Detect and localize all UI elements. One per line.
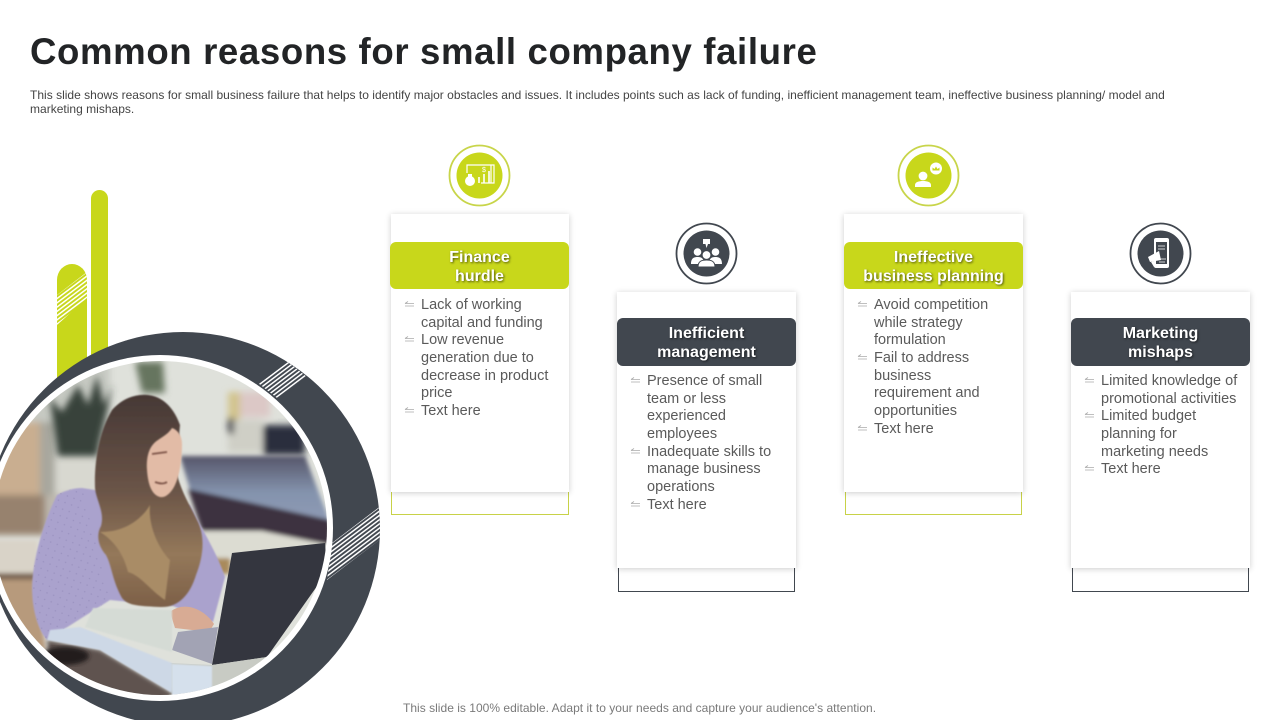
laptop xyxy=(172,543,327,665)
bullet list: Text here xyxy=(874,421,934,437)
decorative photo graphic xyxy=(0,190,380,720)
panel: finance hurdle xyxy=(388,144,572,515)
icon: person with idea bubble xyxy=(898,144,960,206)
bullet list: generation due to xyxy=(421,350,534,366)
heading: ineffective business planning: business planning xyxy=(863,268,1004,285)
face xyxy=(147,428,182,497)
bullet list: Limited budget xyxy=(1101,408,1196,424)
bottom outline box xyxy=(1072,562,1249,592)
bullet list: Limited knowledge of xyxy=(1101,373,1237,389)
bullet list: Lack of working xyxy=(421,297,522,313)
bullet list: while strategy xyxy=(874,315,963,331)
footer note: This slide is 100% editable. Adapt it to your needs and capture your audience's attention. xyxy=(403,701,876,715)
bullet list: Fail to address xyxy=(874,350,969,366)
heading: marketing mishaps: Marketing xyxy=(1123,325,1198,342)
bullet list: Text here xyxy=(647,497,707,513)
bullet list xyxy=(404,297,548,419)
bullet list: business xyxy=(874,368,931,384)
heading: inefficient management xyxy=(617,318,796,366)
icon: phone with megaphone xyxy=(1130,222,1192,284)
bullet list: promotional activities xyxy=(1101,391,1236,407)
heading: finance hurdle xyxy=(390,242,569,289)
bullet list xyxy=(1084,373,1238,477)
heading: ineffective business planning: Ineffective xyxy=(894,249,973,266)
panel: ineffective business planning xyxy=(841,144,1026,515)
bullet list: opportunities xyxy=(874,403,957,419)
bullet list: Avoid competition xyxy=(874,297,988,313)
bullet list: Inadequate skills to xyxy=(647,444,771,460)
card body xyxy=(1071,292,1250,568)
blond strands xyxy=(100,505,170,600)
bullet list: operations xyxy=(647,479,715,495)
lilac gap in hair xyxy=(130,530,146,563)
bullet list: Presence of small xyxy=(647,373,762,389)
bullet list: team or less xyxy=(647,391,726,407)
bullet list: employees xyxy=(647,426,717,442)
photo: woman working on laptop xyxy=(0,355,335,702)
heading: ineffective business planning xyxy=(844,242,1023,289)
bottom outline box xyxy=(391,484,569,515)
bullet list: decrease in product xyxy=(421,368,548,384)
card body xyxy=(391,214,569,492)
panel: marketing mishaps xyxy=(1068,222,1253,592)
notebook xyxy=(85,608,172,652)
bottom outline box xyxy=(618,562,795,592)
bullet list: formulation xyxy=(874,332,946,348)
hand xyxy=(170,607,214,632)
description text: This slide shows reasons for small business failure that helps to identify major obstacles and issues. It includes points such as lack of funding, inefficient management team, ineffective business planning/ model and xyxy=(30,88,1165,102)
bullet list: experienced xyxy=(647,408,726,424)
description text xyxy=(30,88,1165,116)
bullet list: capital and funding xyxy=(421,315,543,331)
bullet list: marketing needs xyxy=(1101,444,1208,460)
card body xyxy=(617,292,796,568)
panel: inefficient management xyxy=(614,222,799,592)
sweater xyxy=(32,488,225,640)
heading: finance hurdle: hurdle xyxy=(455,268,504,285)
foreground papers xyxy=(44,627,212,695)
lime bars xyxy=(57,190,108,378)
icon: finance chart and money bag: $ xyxy=(482,167,486,174)
dark ring xyxy=(0,332,382,720)
bottom outline box xyxy=(845,484,1022,515)
heading: finance hurdle: Finance xyxy=(449,249,510,266)
bullet list: manage business xyxy=(647,461,761,477)
heading: marketing mishaps xyxy=(1071,318,1250,366)
bullet list xyxy=(630,373,771,513)
icon: team with thumbs down xyxy=(676,222,738,284)
card body xyxy=(844,214,1023,492)
bullet list: requirement and xyxy=(874,385,980,401)
bullet list: Text here xyxy=(421,403,481,419)
bullet list: Low revenue xyxy=(421,332,504,348)
hair xyxy=(95,395,203,607)
bullet list: planning for xyxy=(1101,426,1177,442)
heading: inefficient management: Inefficient xyxy=(669,325,744,342)
icon: finance chart and money bag xyxy=(448,144,510,206)
title: Common reasons for small company failure xyxy=(30,31,817,72)
heading: marketing mishaps: mishaps xyxy=(1128,344,1193,361)
bullet list xyxy=(858,297,988,437)
description text: marketing mishaps. xyxy=(30,102,134,116)
bullet list: Text here xyxy=(1101,461,1161,477)
bullet list: price xyxy=(421,385,452,401)
heading: inefficient management: management xyxy=(657,344,756,361)
table corner xyxy=(170,657,266,695)
